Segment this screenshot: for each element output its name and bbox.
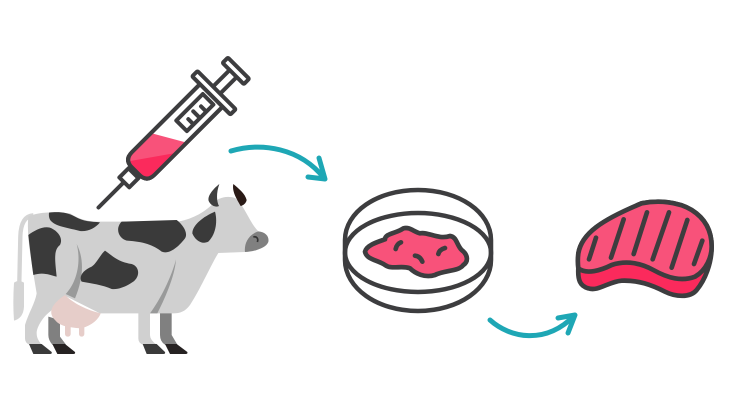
cow tail [13,215,33,321]
syringe barrel [124,83,223,182]
syringe hub [119,168,138,187]
cow snout [245,231,269,252]
cow body folds [66,244,176,313]
arrow: syringe to dish [231,147,325,179]
syringe barrel outline [124,83,223,182]
cow spots [28,212,216,289]
cow horns [208,184,247,207]
dish outer rim [345,190,491,311]
icon: syringe [80,49,258,227]
syringe needle [98,182,124,208]
syringe plunger handle [223,58,249,84]
icon: petri dish [345,190,491,311]
arrow: dish to steak [490,315,575,336]
cultured meat in dish [365,228,467,276]
steak grill marks [589,212,702,268]
syringe plunger rod [212,69,237,95]
syringe liquid light [125,121,186,181]
steak top [578,202,712,279]
syringe flange [192,71,236,115]
syringe scale window [176,94,213,131]
icon: steak [578,202,712,296]
cow hooves [29,344,187,354]
dish inner rim [345,213,491,292]
syringe liquid dark [127,133,176,181]
cow body [25,197,258,345]
cow far legs [48,313,177,345]
icon: cow [13,184,269,354]
steak side [578,202,712,296]
cow udder [51,295,101,337]
